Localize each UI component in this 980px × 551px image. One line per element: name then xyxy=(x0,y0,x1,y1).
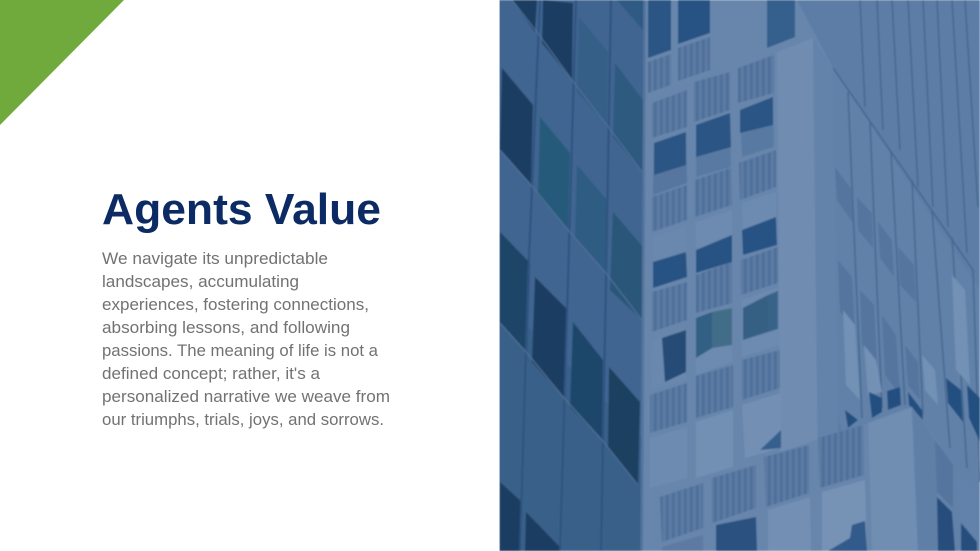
body paragraph: experiences, fostering connections, xyxy=(102,295,369,314)
body paragraph: our triumphs, trials, joys, and sorrows. xyxy=(102,410,384,429)
centre window column 2 xyxy=(694,72,733,478)
central block xyxy=(642,0,831,551)
tower panels xyxy=(835,167,920,400)
body paragraph: passions. The meaning of life is not a xyxy=(102,341,379,360)
body paragraph xyxy=(102,249,390,429)
body paragraph: absorbing lessons, and following xyxy=(102,318,350,337)
centre window column 3 xyxy=(738,55,781,458)
lower right windows xyxy=(935,440,953,508)
lower block xyxy=(836,479,870,550)
body paragraph: defined concept; rather, it's a xyxy=(102,364,321,383)
title: Agents Value xyxy=(102,185,381,234)
tower vertical lines xyxy=(833,0,980,482)
body paragraph: We navigate its unpredictable xyxy=(102,249,328,268)
centre window column 1 xyxy=(650,90,688,432)
left facade panel shading xyxy=(500,329,640,548)
body paragraph: personalized narrative we weave from xyxy=(102,387,390,406)
photo: blue-tinted office tower xyxy=(499,0,980,551)
upper-right tower xyxy=(798,0,980,432)
body paragraph: landscapes, accumulating xyxy=(102,272,299,291)
concrete column xyxy=(777,38,818,480)
left facade mullions xyxy=(520,0,645,551)
left facade windows xyxy=(500,0,643,551)
top windows xyxy=(648,0,671,58)
green corner triangle xyxy=(0,0,124,125)
